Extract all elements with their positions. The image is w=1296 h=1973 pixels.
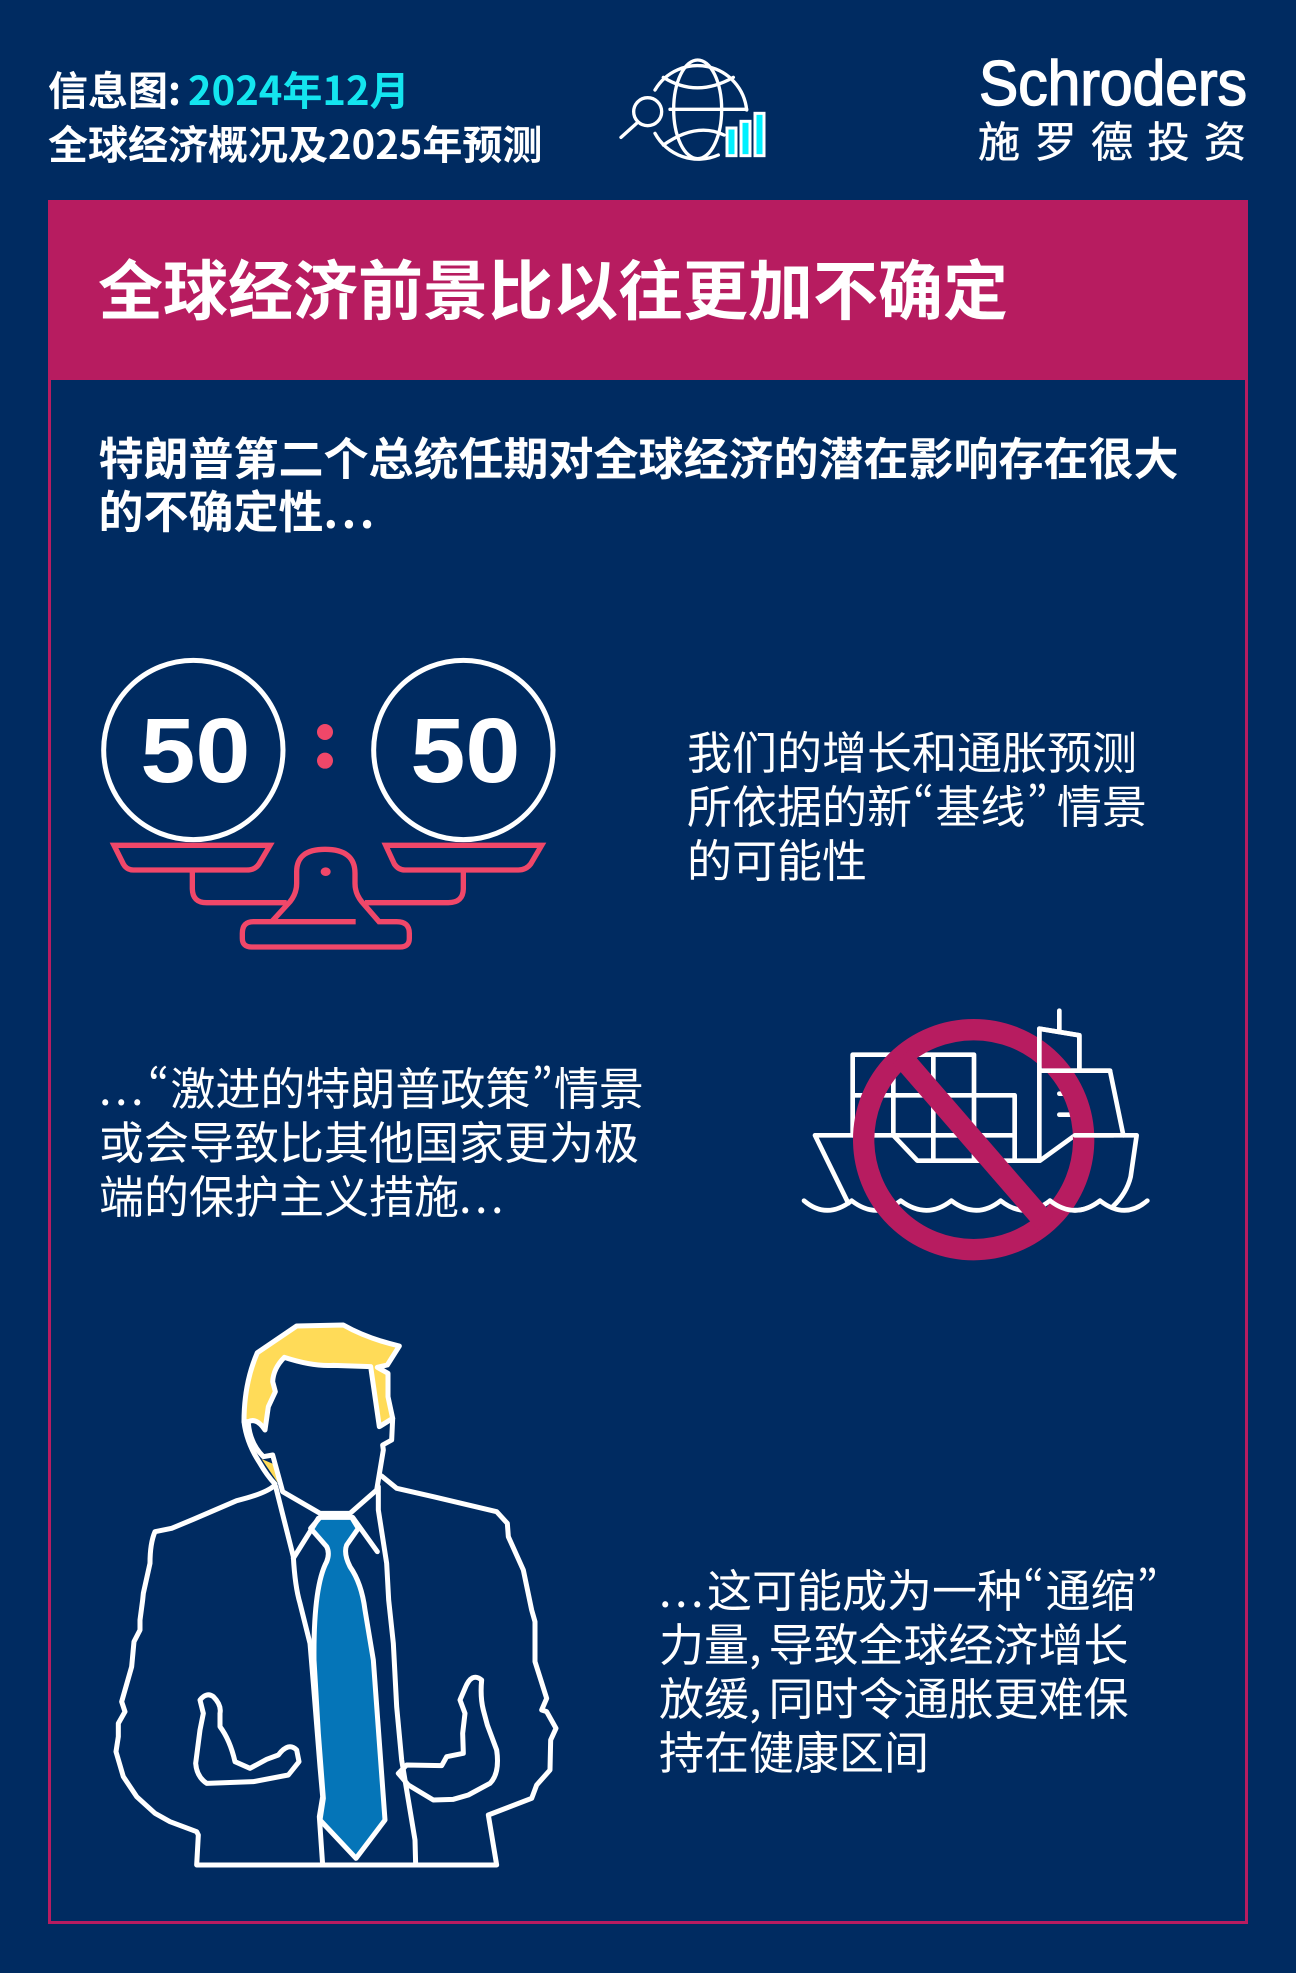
scale [114, 845, 542, 947]
intro line 1: 特朗普第二个总统任期对全球经济的潜在影响存在很大 [98, 423, 1179, 488]
line 3: 端的保护主义措施... [99, 1160, 507, 1226]
prohibition sign [864, 1030, 1084, 1250]
intro text [98, 423, 1179, 541]
icon: container ship with prohibition sign [802, 1008, 1150, 1260]
line 2: 或会导致比其他国家更为极 [99, 1106, 639, 1172]
icon: balance scale 50:50 [101, 658, 556, 950]
line 1: ...这可能成为一种“通缩” [659, 1554, 1158, 1620]
left hand [196, 1695, 299, 1783]
title banner [48, 200, 1248, 380]
logo Chinese name: 施罗德投资 [978, 109, 1261, 170]
icon: man in suit silhouette [114, 1322, 558, 1868]
intro line 2: 的不确定性... [98, 476, 378, 541]
line 3: 的可能性 [687, 824, 867, 890]
line 2: 所依据的新“基线” 情景 [687, 770, 1147, 836]
line 1: ...“激进的特朗普政策”情景 [99, 1052, 644, 1118]
ship superstructure and stern over the sign [1039, 1029, 1113, 1210]
header text [48, 59, 542, 171]
header line: subject: 全球经济概况及2025年预测 [48, 113, 542, 171]
text block: baseline scenario [687, 716, 1147, 890]
line 2: 力量,导致全球经济增长 [659, 1608, 1129, 1674]
line 1: 我们的增长和通胀预测 [687, 716, 1137, 782]
hair sideburn [262, 1459, 279, 1485]
logo: Schroders [978, 49, 1261, 170]
ship [804, 1011, 1147, 1210]
tie [311, 1517, 385, 1858]
header line: infographic date: 信息图:2024年12月 [48, 59, 410, 117]
colon [317, 724, 333, 769]
text block: deflationary force [659, 1554, 1158, 1782]
suit and face outline [116, 1418, 556, 1865]
left circle: 50 [140, 700, 250, 802]
right circle [374, 660, 553, 840]
title: 全球经济前景比以往更加不确定 [98, 238, 1008, 332]
text block: protectionism [99, 1052, 644, 1226]
logo wordmark: Schroders [979, 49, 1247, 119]
left circle [104, 660, 283, 840]
right circle: 50 [410, 700, 520, 802]
line 4: 持在健康区间 [659, 1716, 929, 1782]
hair [244, 1325, 399, 1430]
line 3: 放缓,同时令通胀更难保 [659, 1662, 1129, 1728]
right hand [398, 1677, 498, 1800]
icon: globe with magnifier and bars [619, 58, 766, 161]
